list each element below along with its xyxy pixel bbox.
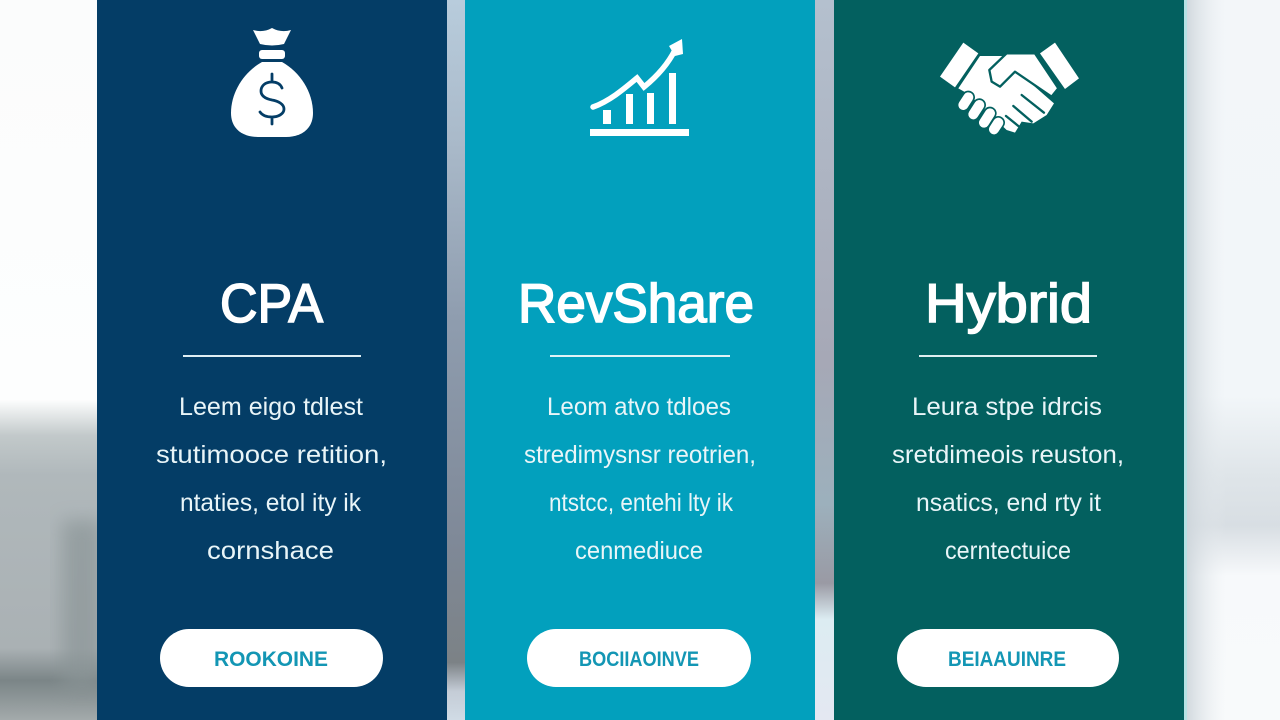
heading: RevShare: RevShare [518, 272, 754, 334]
text block: Leem eigo tdlest [179, 393, 363, 421]
icon: handshake [940, 43, 1079, 133]
text block: ntaties, etol ity ik [180, 489, 361, 517]
button [160, 629, 383, 687]
text block [156, 393, 387, 565]
text block: cornshace [207, 537, 334, 565]
button: BEIAAUINRE [948, 648, 1066, 671]
divider [183, 355, 361, 357]
text block [524, 393, 756, 565]
text block: stutimooce retition, [156, 441, 387, 469]
divider [550, 355, 730, 357]
panel: CPA [97, 0, 447, 720]
button [527, 629, 751, 687]
text block: Leom atvo tdloes [547, 393, 731, 421]
panel: Hybrid [834, 0, 1184, 720]
text block: nsatics, end rty it [916, 489, 1101, 517]
icon: growth chart [590, 39, 689, 136]
heading: Hybrid: Hybrid [925, 272, 1092, 334]
icon: money bag [231, 28, 313, 137]
divider [919, 355, 1097, 357]
text block: cerntectuice [945, 537, 1071, 565]
panel: RevShare [465, 0, 815, 720]
text block [892, 393, 1124, 565]
text block: ntstcc, entehi lty ik [549, 489, 733, 517]
button: BOCIIAOINVE [579, 648, 699, 671]
text block: stredimysnsr reotrien, [524, 441, 756, 469]
text block: Leura stpe idrcis [912, 393, 1102, 421]
text block: cenmediuce [575, 537, 703, 565]
button: ROOKOINE [214, 648, 328, 671]
text block: sretdimeois reuston, [892, 441, 1124, 469]
button [897, 629, 1119, 687]
heading: CPA: CPA [220, 272, 323, 334]
